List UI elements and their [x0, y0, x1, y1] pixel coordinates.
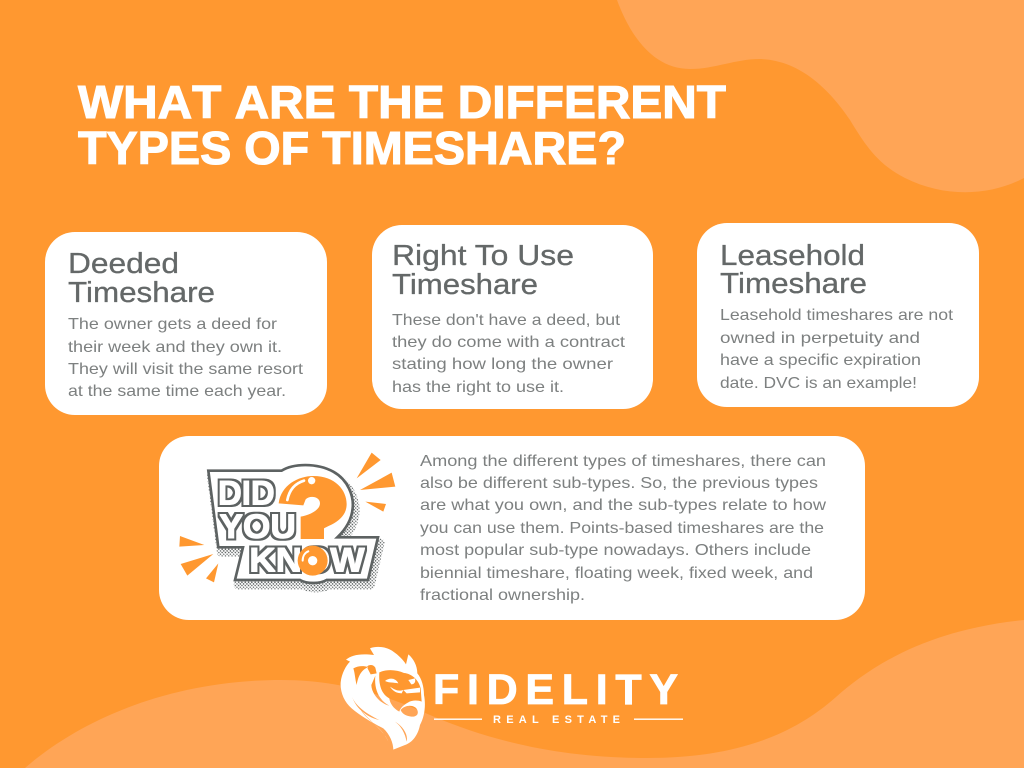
- text: leasehold description: [720, 307, 954, 392]
- heading: deeded: Timeshare: [68, 277, 215, 309]
- question mark: [279, 476, 347, 539]
- title: WHAT ARE THE DIFFERENT: [78, 76, 726, 128]
- text: right to use description: [392, 312, 626, 396]
- heading: deeded: [68, 248, 215, 309]
- heading: right to use: [392, 240, 574, 301]
- text: did you know body: Among the different types of timeshares, there can: [420, 453, 826, 470]
- panel: deeded timeshare: [45, 232, 327, 415]
- logo rule right: [634, 718, 683, 720]
- badge outline: [208, 465, 378, 583]
- text: did you know body: fractional ownership.: [420, 587, 585, 604]
- text: leasehold description: Leasehold timeshares are not: [720, 307, 954, 324]
- text: leasehold description: have a specific expiration: [720, 352, 921, 369]
- text: right to use description: has the right to use it.: [392, 379, 564, 396]
- word: you: YOU: [219, 508, 296, 546]
- top right blob: [617, 0, 1024, 192]
- rays: [179, 453, 395, 582]
- text: deeded description: their week and they own it.: [68, 339, 282, 356]
- halftone shadow: [211, 470, 381, 588]
- heading: leasehold: [720, 240, 867, 300]
- heading: right to use: Timeshare: [392, 269, 538, 301]
- panel: did you know: [159, 436, 865, 620]
- icon: did you know badge: [179, 453, 395, 588]
- text: did you know body: you can use them. Points-based timeshares are the: [420, 520, 824, 537]
- heading: leasehold: Leasehold: [720, 240, 865, 272]
- logo: fidelity real estate: [341, 647, 683, 750]
- panel: leasehold timeshare: [697, 223, 979, 407]
- word: know: KNOW: [249, 541, 365, 579]
- question highlight: [287, 481, 304, 500]
- heading: deeded: Deeded: [68, 248, 179, 280]
- orange dot: [298, 546, 328, 576]
- icon: lion head: [341, 647, 425, 750]
- text: did you know body: [420, 453, 827, 604]
- text: deeded description: The owner gets a deed for: [68, 316, 278, 333]
- text: leasehold description: owned in perpetuity and: [720, 330, 920, 347]
- heading: right to use: Right To Use: [392, 240, 574, 272]
- wordmark: real estate: REAL ESTATE: [493, 714, 620, 726]
- text: deeded description: at the same time each year.: [68, 383, 286, 400]
- text: did you know body: are what you own, and the sub-types relate to how: [420, 497, 827, 514]
- title: TYPES OF TIMESHARE?: [78, 122, 626, 174]
- logo rule left: [434, 718, 482, 720]
- wordmark: fidelity: FIDELITY: [433, 666, 678, 714]
- text: deeded description: [68, 316, 304, 400]
- text: did you know body: most popular sub-type nowadays. Others include: [420, 542, 811, 559]
- text: did you know body: biennial timeshare, floating week, fixed week, and: [420, 565, 813, 582]
- bottom wave: [25, 620, 1024, 768]
- text: leasehold description: date. DVC is an example!: [720, 375, 917, 392]
- word: did: DID: [218, 474, 275, 512]
- panel: right to use timeshare: [372, 225, 653, 409]
- text: did you know body: also be different sub-types. So, the previous types: [420, 475, 818, 492]
- text: right to use description: These don't have a deed, but: [392, 312, 621, 329]
- text: right to use description: stating how long the owner: [392, 356, 614, 373]
- heading: leasehold: Timeshare: [720, 268, 867, 300]
- text: right to use description: they do come with a contract: [392, 334, 626, 351]
- title: [78, 76, 726, 174]
- text: deeded description: They will visit the same resort: [68, 361, 304, 378]
